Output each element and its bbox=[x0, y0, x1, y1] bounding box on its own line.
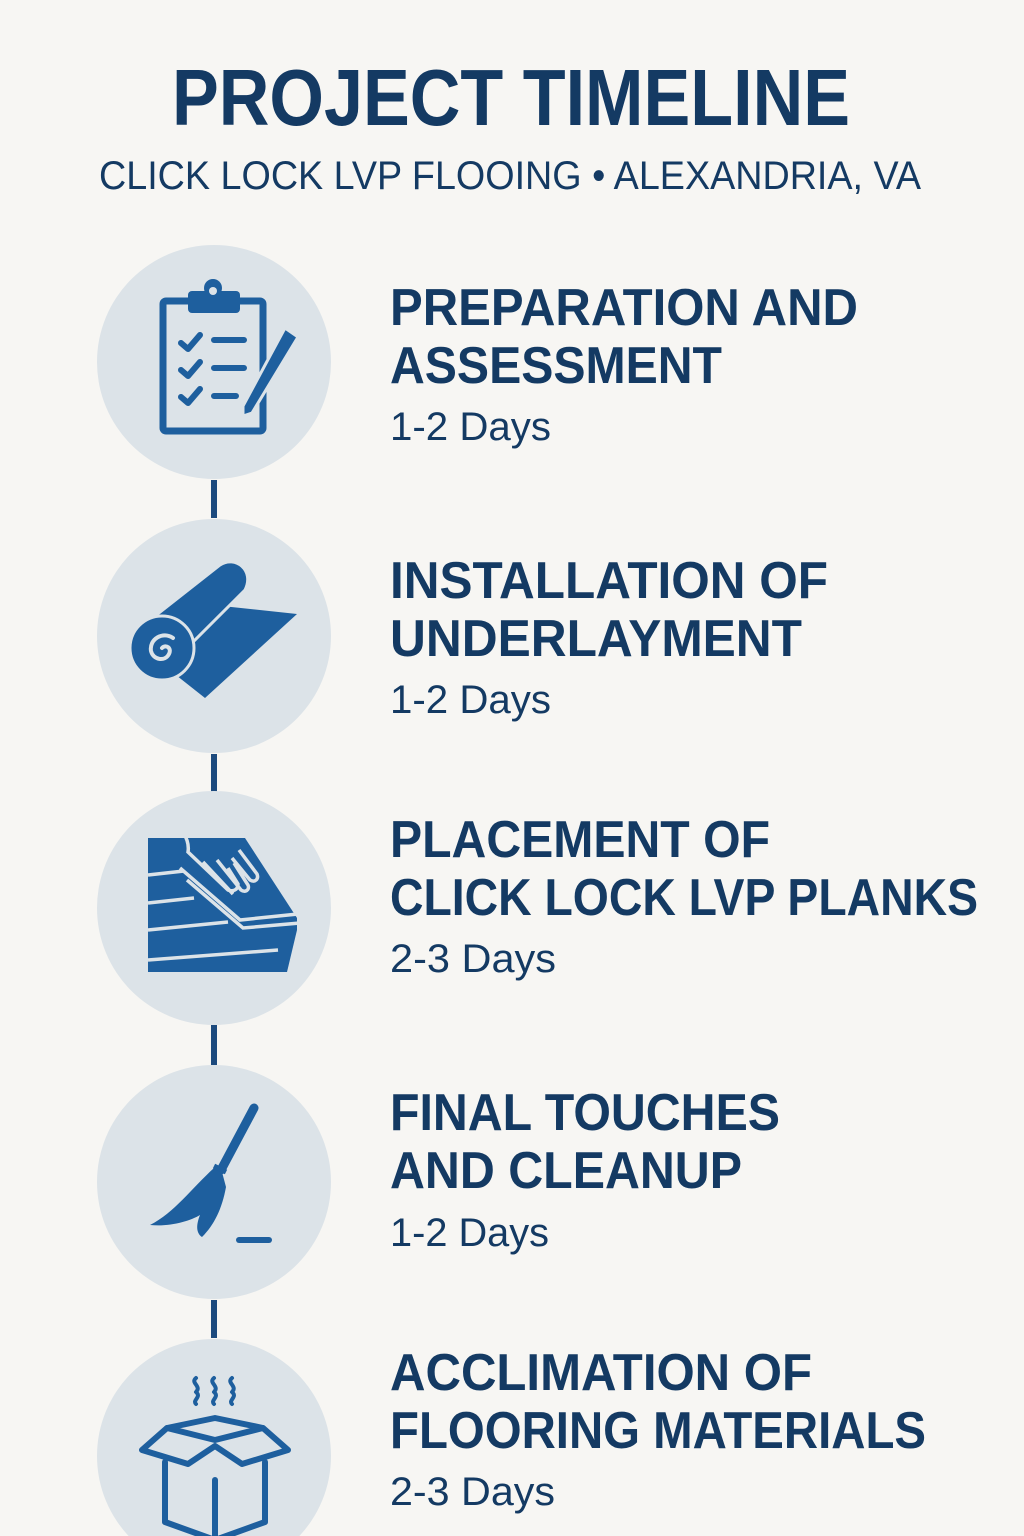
icon circle: broom bbox=[97, 1065, 331, 1299]
step 2 text: UNDERLAYMENT bbox=[390, 610, 802, 668]
step 3 text: PLACEMENT OF bbox=[390, 811, 770, 869]
step 1 text: 1-2 Days bbox=[390, 405, 551, 449]
step 3 text bbox=[390, 811, 978, 981]
connector lines bbox=[211, 480, 217, 1338]
step 2 text bbox=[390, 552, 828, 722]
step 5: acclimation bbox=[97, 1339, 926, 1536]
icon circle: clipboard bbox=[97, 245, 331, 479]
icon circle: open box bbox=[97, 1339, 331, 1536]
step 4: cleanup bbox=[97, 1065, 780, 1299]
step 4 text: AND CLEANUP bbox=[390, 1142, 742, 1200]
step 4 text: 1-2 Days bbox=[390, 1211, 549, 1255]
step 2: underlayment bbox=[97, 519, 828, 753]
step 5 text: 2-3 Days bbox=[390, 1470, 555, 1514]
step 2 text: INSTALLATION OF bbox=[390, 552, 828, 610]
step 4 text: FINAL TOUCHES bbox=[390, 1084, 780, 1142]
title: PROJECT TIMELINE bbox=[172, 53, 850, 142]
step 4 text bbox=[390, 1084, 780, 1255]
icon circle: hand on planks bbox=[97, 791, 331, 1025]
step 3: planks bbox=[97, 791, 978, 1025]
step 1 text: ASSESSMENT bbox=[390, 337, 722, 395]
step 2 text: 1-2 Days bbox=[390, 678, 551, 722]
step 1: preparation bbox=[97, 245, 858, 479]
step 3 text: 2-3 Days bbox=[390, 937, 556, 981]
subtitle: CLICK LOCK LVP FLOOING • ALEXANDRIA, VA bbox=[99, 154, 921, 198]
step 1 text bbox=[390, 279, 858, 449]
step 1 text: PREPARATION AND bbox=[390, 279, 858, 337]
step 5 text: ACCLIMATION OF bbox=[390, 1344, 812, 1402]
icon circle: roll bbox=[97, 519, 331, 753]
step 5 text: FLOORING MATERIALS bbox=[390, 1402, 926, 1460]
step 5 text bbox=[390, 1344, 926, 1514]
